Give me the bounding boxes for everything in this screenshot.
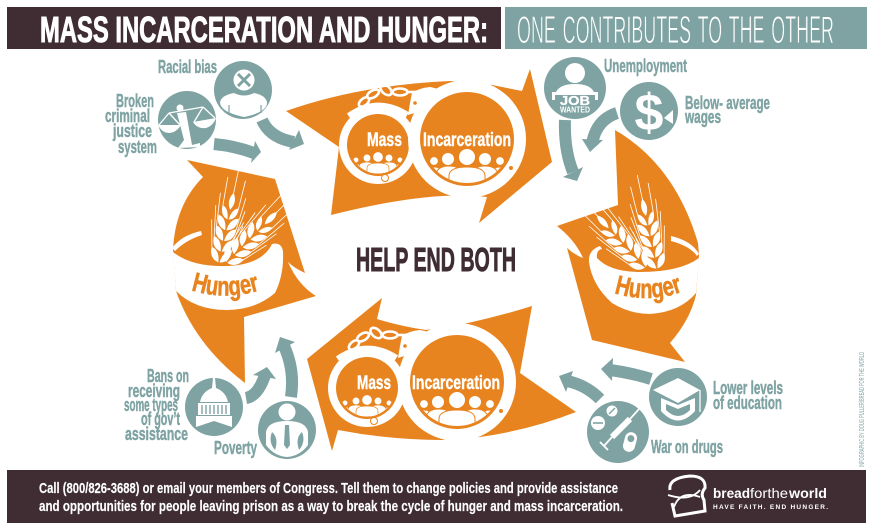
label: receiving bbox=[128, 381, 180, 401]
label: system bbox=[118, 137, 157, 157]
arrow bbox=[582, 113, 617, 152]
logo wordmark: forthe bbox=[750, 485, 788, 501]
label bbox=[105, 91, 157, 157]
bowl bbox=[589, 246, 699, 314]
label: Lower levels bbox=[713, 378, 783, 398]
icon: job wanted: WANTED bbox=[560, 106, 590, 114]
handcuffs with people bbox=[339, 80, 526, 198]
wheat bbox=[203, 166, 298, 273]
bowl bbox=[173, 244, 283, 310]
icon: job wanted: JOB bbox=[560, 93, 590, 108]
icon: dollar bbox=[620, 82, 678, 142]
arrow bbox=[563, 120, 583, 181]
label: incarceration: Incarceration bbox=[423, 130, 511, 151]
arrow bbox=[601, 358, 651, 381]
footer call text: and opportunities for people leaving prison as a way to break the cycle of hunger and mass incarceration. bbox=[39, 499, 623, 515]
label: mass: Mass bbox=[357, 373, 391, 394]
logo wordmark: world bbox=[788, 485, 827, 501]
right arrow: hunger bowl bbox=[557, 130, 699, 362]
wheat bbox=[575, 172, 673, 278]
label: justice bbox=[112, 121, 152, 141]
label bbox=[124, 366, 189, 444]
icon: bread logo bbox=[668, 476, 705, 516]
arrow bbox=[214, 141, 261, 163]
left arrow: hunger bowl bbox=[173, 160, 316, 383]
label: assistance bbox=[125, 424, 188, 444]
cause: below-average wages bbox=[582, 82, 770, 152]
icon: dollar: $ bbox=[635, 84, 664, 142]
handcuffs with people bbox=[328, 323, 516, 441]
footer bar bbox=[7, 470, 866, 523]
logo wordmark bbox=[713, 485, 828, 511]
header bar: title bbox=[7, 7, 501, 50]
icon: capitol dome bbox=[185, 378, 243, 436]
label: mass: Mass bbox=[367, 130, 402, 151]
footer call text bbox=[39, 481, 623, 515]
arrow bbox=[262, 120, 304, 150]
label: Bans on bbox=[147, 366, 189, 386]
logo wordmark: bread bbox=[713, 485, 750, 501]
label: Below- average bbox=[685, 93, 770, 113]
cause: bans on assistance bbox=[124, 366, 276, 444]
label: incarceration: Incarceration bbox=[412, 373, 500, 394]
arrow bbox=[275, 337, 295, 397]
icon: job wanted bbox=[544, 57, 606, 119]
label: of education bbox=[713, 393, 782, 413]
cause: broken criminal justice system bbox=[105, 91, 261, 163]
header bar: title: MASS INCARCERATION AND HUNGER: bbox=[40, 9, 488, 50]
icon: scales of justice bbox=[158, 91, 216, 149]
label: of gov’t bbox=[141, 409, 180, 429]
label: Unemployment bbox=[604, 56, 687, 76]
label bbox=[684, 93, 770, 127]
arrow bbox=[559, 371, 600, 399]
icon: pills and syringe bbox=[587, 401, 649, 463]
label: Racial bias bbox=[158, 57, 217, 77]
label: hunger: Hunger bbox=[615, 275, 680, 304]
logo wordmark: HAVE FAITH. END HUNGER. bbox=[713, 504, 828, 511]
label: Poverty bbox=[214, 438, 257, 458]
bottom arrow: mass incarceration bbox=[307, 298, 576, 451]
icon: person with x bbox=[214, 61, 272, 119]
label: hunger: Hunger bbox=[192, 272, 257, 302]
center call to action: HELP END BOTH bbox=[356, 241, 516, 278]
cause: unemployment bbox=[544, 56, 687, 181]
cause: poverty bbox=[214, 337, 316, 459]
label: Broken bbox=[116, 91, 154, 111]
cause: racial bias bbox=[158, 57, 304, 150]
icon: graduation cap bbox=[649, 368, 707, 426]
label: criminal bbox=[105, 106, 150, 126]
cause: lower levels of education bbox=[601, 358, 783, 426]
icon: person with tie bbox=[258, 401, 316, 459]
footer call text: Call (800/826-3688) or email your members of Congress. Tell them to change policies and provide assistance bbox=[39, 481, 618, 497]
arrow bbox=[246, 367, 276, 398]
label bbox=[713, 378, 783, 413]
label: War on drugs bbox=[651, 437, 723, 457]
top arrow: mass incarceration bbox=[286, 69, 552, 223]
cause: war on drugs bbox=[559, 371, 723, 463]
vertical credit: INFOGRAPHIC BY DOUG PULLER/BREAD FOR THE WORLD bbox=[857, 352, 866, 467]
label: some types bbox=[124, 395, 178, 415]
label: wages bbox=[684, 107, 721, 127]
